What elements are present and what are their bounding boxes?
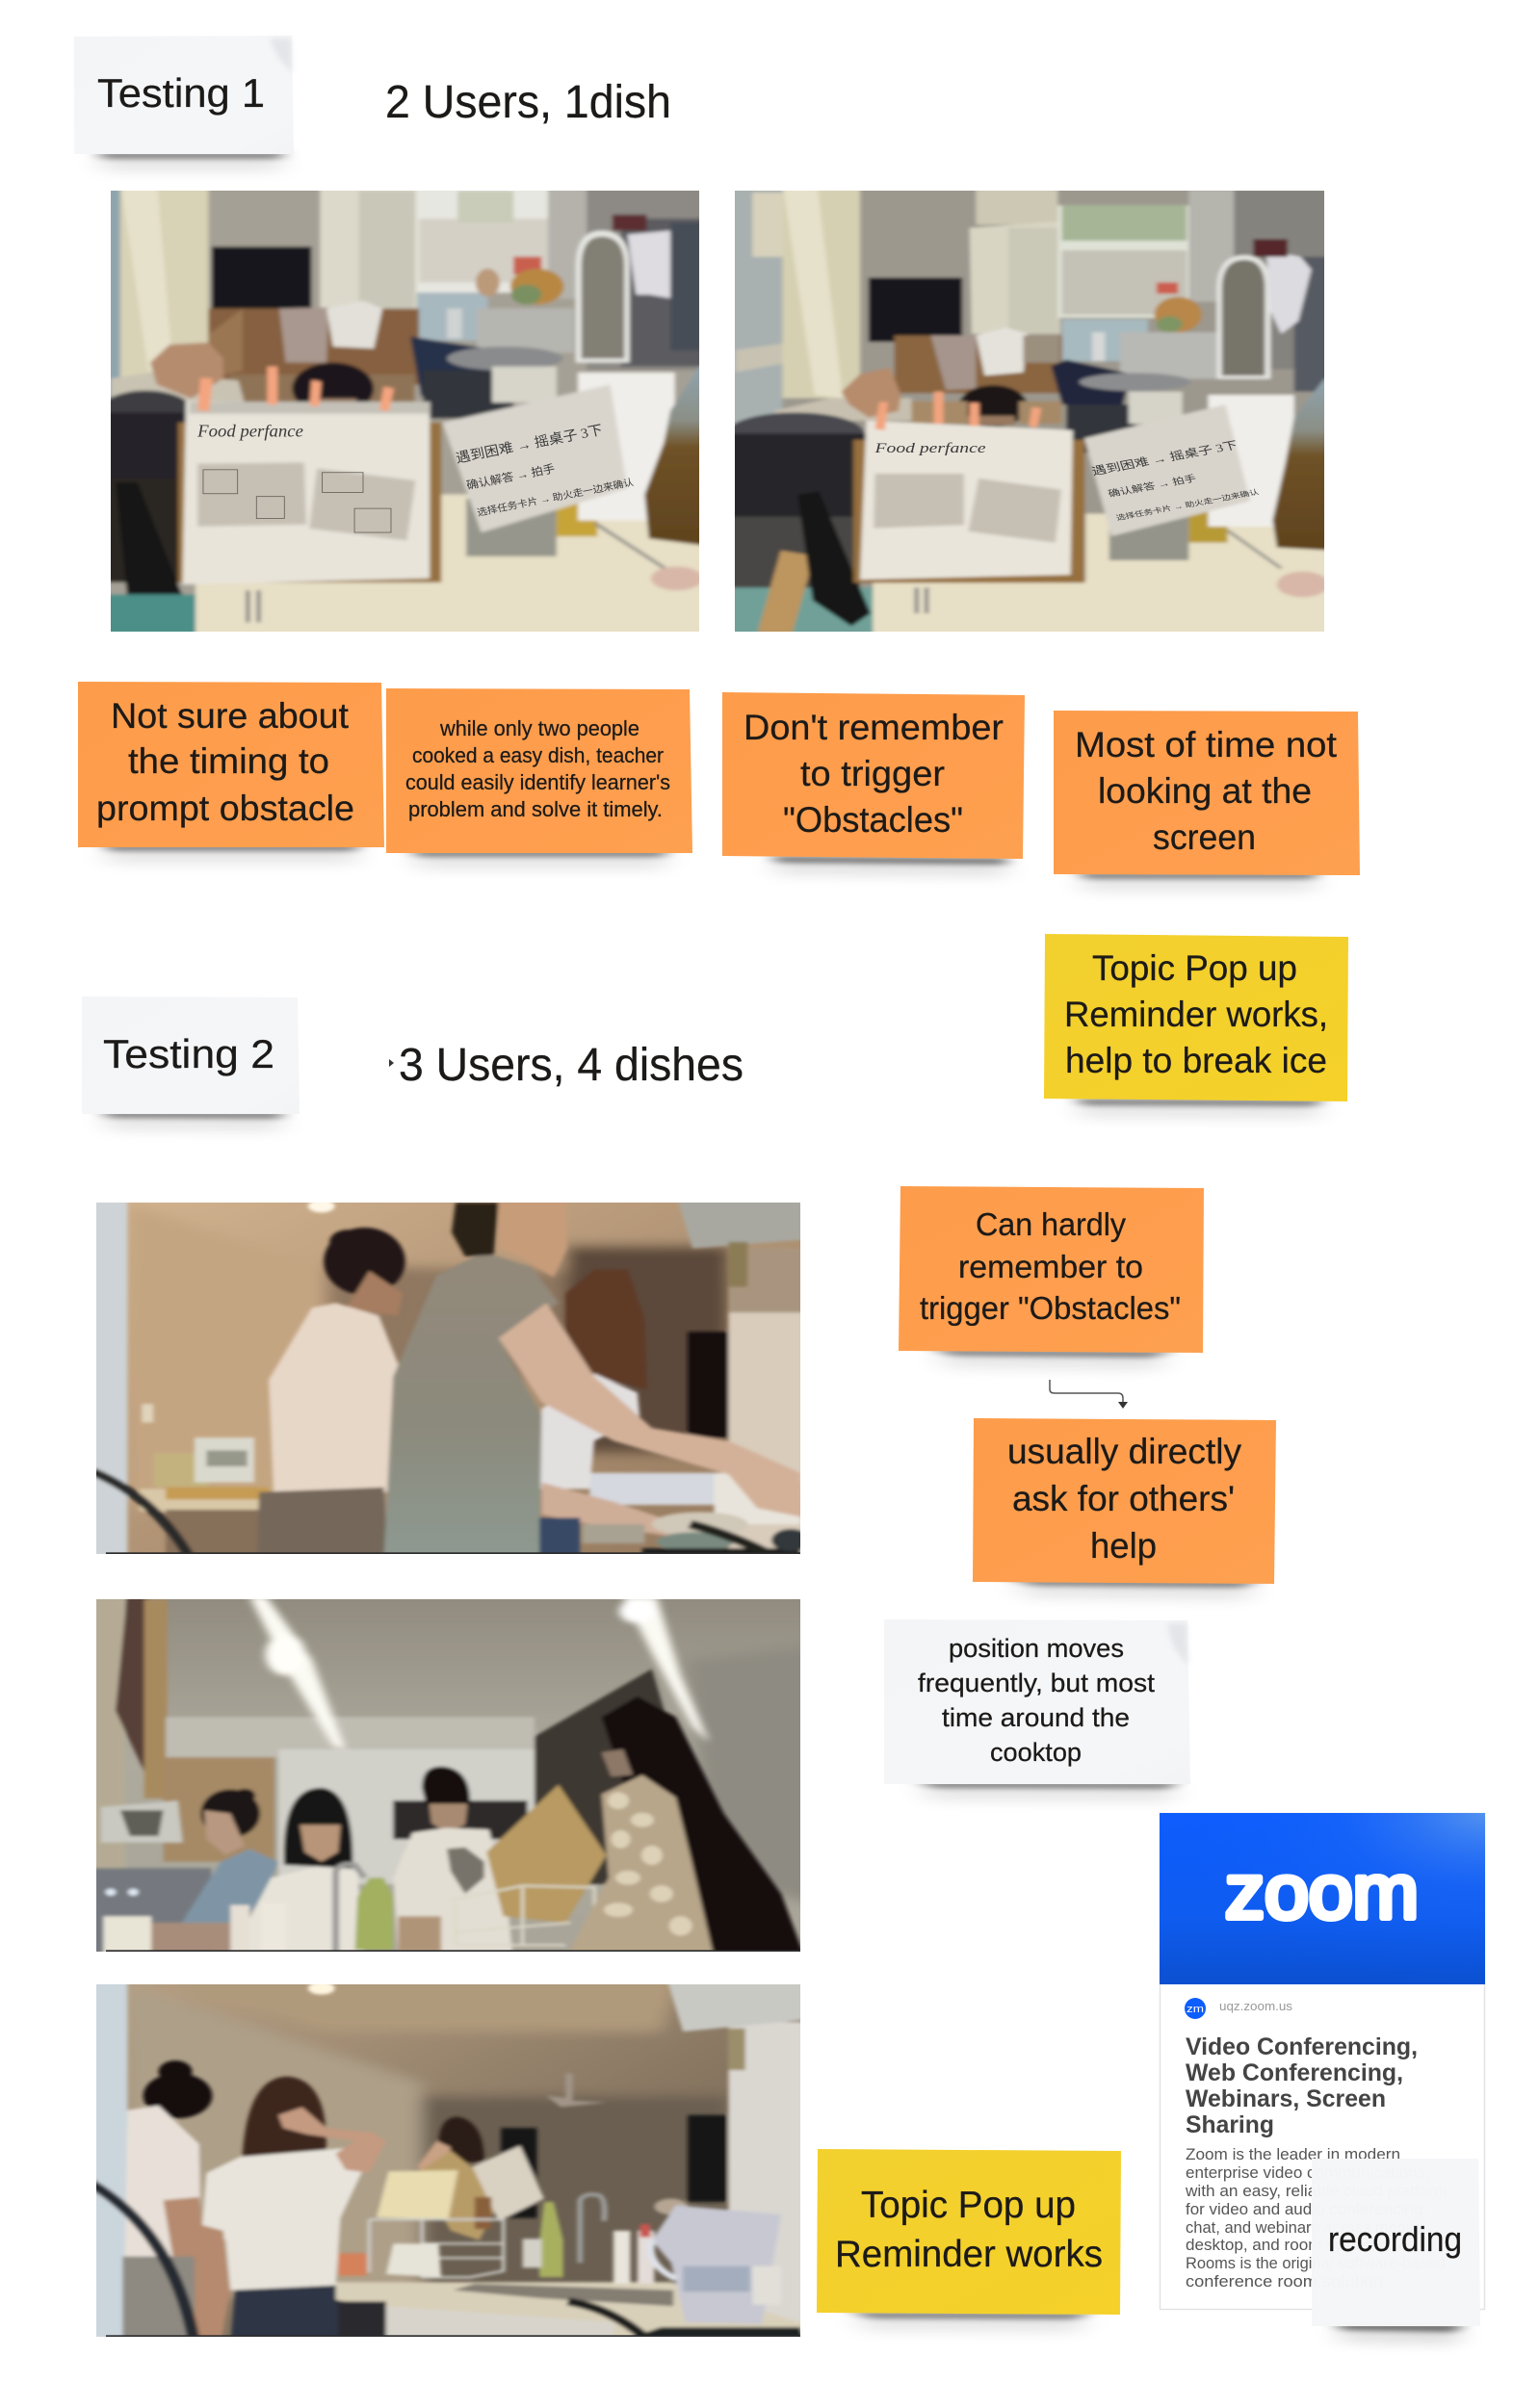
site icon and url: zm bbox=[1187, 2004, 1204, 2015]
card description: with an easy, reliable cloud platform bbox=[1185, 2182, 1448, 2200]
handwritten instruction note: 选择任务卡片 → 助火走一边来确认 bbox=[476, 476, 635, 519]
bottom edge bbox=[106, 2335, 800, 2337]
sticky note: Topic Pop up Reminder works, help to break ice: help to break ice bbox=[1065, 1041, 1327, 1080]
sticky note: while only two people: cooked a easy dish, teacher bbox=[412, 743, 664, 767]
handwriting on the prototype board: Food perfance bbox=[196, 422, 303, 440]
sticky note: Don't remember to trigger Obstacles: "Obstacles" bbox=[783, 800, 963, 840]
handwriting: taste tags bbox=[203, 470, 391, 532]
sticky note: Don't remember to trigger Obstacles bbox=[722, 692, 1025, 865]
sticky note: position moves frequently: time around the bbox=[942, 1703, 1130, 1732]
sticky note: while only two people bbox=[386, 688, 692, 857]
sticky note: Testing 2: Testing 2 bbox=[103, 1031, 274, 1076]
card description: for video and audio conferencing, bbox=[1186, 2200, 1427, 2218]
sticky note: while only two people: could easily identify learner's bbox=[405, 770, 670, 794]
link card: zoom bbox=[1160, 1813, 1485, 2309]
heading: 3 Users, 4 dishes: 3 Users, 4 dishes bbox=[399, 1040, 743, 1091]
photo: paper prototype on counter, first angle bbox=[111, 191, 699, 632]
heading: 2 Users, 1dish: 2 Users, 1dish bbox=[385, 77, 671, 128]
sticky note: Testing 2 bbox=[82, 997, 300, 1119]
handwritten instruction note: 遇到困难 → 摇桌子 3下 bbox=[455, 422, 604, 466]
sticky note: Can hardly remember to trigger Obstacles bbox=[899, 1186, 1204, 1358]
sticky note: while only two people: while only two people bbox=[439, 716, 639, 740]
sticky note: position moves frequently bbox=[884, 1619, 1190, 1789]
sticky note: Can hardly remember to trigger Obstacles: remember to bbox=[958, 1249, 1143, 1284]
photo: users in the kitchen with dish rack and jug bbox=[96, 1984, 800, 2337]
card description: chat, and webinars across mobile, bbox=[1186, 2218, 1426, 2237]
card description: desktop, and room systems. Zoom bbox=[1186, 2236, 1438, 2254]
sticky note: Most of time not looking at the screen bbox=[1054, 711, 1360, 879]
sticky note: Not sure about the timing: prompt obstacle bbox=[96, 789, 354, 828]
site icon and url bbox=[1185, 1998, 1293, 2019]
sticky note: Most of time not looking at the screen: looking at the bbox=[1098, 771, 1312, 811]
photo: paper prototype on counter, second angle bbox=[735, 191, 1324, 632]
sticky note: position moves frequently: frequently, but most bbox=[918, 1669, 1156, 1697]
card title bbox=[1186, 2033, 1418, 2138]
bottom edge bbox=[106, 1950, 800, 1952]
sticky note: Topic Pop up Reminder works, help to break ice bbox=[1044, 934, 1348, 1106]
handwritten instruction note, second angle: 选择任务卡片 → 助火走一边来确认 bbox=[1115, 487, 1260, 522]
sticky note: Topic Pop up Reminder works, help to break ice: Topic Pop up bbox=[1092, 948, 1297, 988]
arrow: from Can hardly to usually directly bbox=[1050, 1380, 1128, 1409]
sticky note: Not sure about the timing: Not sure about bbox=[111, 696, 350, 736]
handwriting on the second board: Food perfance bbox=[874, 440, 986, 456]
sticky note: Testing 1 bbox=[74, 36, 294, 159]
small connector arrow tip bbox=[389, 1059, 394, 1067]
sticky note: position moves frequently: position moves bbox=[949, 1634, 1124, 1663]
sticky note: while only two people: problem and solve it timely. bbox=[408, 797, 663, 821]
site icon and url: uqz.zoom.us bbox=[1219, 1999, 1293, 2013]
card title: Web Conferencing, bbox=[1186, 2059, 1403, 2086]
card description: Zoom is the leader in modern bbox=[1186, 2145, 1400, 2163]
sticky note: recording bbox=[1312, 2159, 1480, 2332]
sticky note: Topic Pop up Reminder works: Topic Pop up bbox=[861, 2185, 1076, 2226]
card title: Sharing bbox=[1186, 2111, 1274, 2138]
sticky note: Don't remember to trigger Obstacles: Don't remember bbox=[743, 708, 1004, 747]
sticky note: usually directly ask for others' help bbox=[973, 1418, 1276, 1588]
zoom banner: zoom bbox=[1225, 1849, 1419, 1934]
sticky note: Don't remember to trigger Obstacles: to trigger bbox=[800, 754, 945, 793]
sticky note: position moves frequently: cooktop bbox=[990, 1738, 1082, 1767]
sticky note: usually directly ask for others' help: ask for others' bbox=[1012, 1479, 1235, 1518]
sticky note: Most of time not looking at the screen: screen bbox=[1153, 817, 1256, 857]
card description bbox=[1185, 2145, 1448, 2291]
sticky note: Can hardly remember to trigger Obstacles: Can hardly bbox=[976, 1206, 1126, 1242]
sticky note: Topic Pop up Reminder works, help to break ice: Reminder works, bbox=[1064, 995, 1328, 1034]
sticky note: Topic Pop up Reminder works: Reminder works bbox=[835, 2234, 1103, 2275]
sticky note: Topic Pop up Reminder works bbox=[817, 2149, 1121, 2319]
photo: three users cooking at the stove bbox=[96, 1203, 800, 1554]
sticky note: Most of time not looking at the screen: Most of time not bbox=[1075, 725, 1338, 764]
sticky note: recording: recording bbox=[1328, 2219, 1462, 2259]
sticky note: usually directly ask for others' help: help bbox=[1090, 1526, 1157, 1566]
sticky note: Testing 1: Testing 1 bbox=[97, 70, 265, 116]
card description: conference room solution bbox=[1186, 2272, 1383, 2291]
handwritten instruction note, second angle: 确认解答 → 拍手 bbox=[1107, 472, 1198, 500]
sticky note: Not sure about the timing bbox=[78, 682, 384, 851]
handwritten instruction note: 确认解答 → 拍手 bbox=[465, 461, 557, 492]
card description: Rooms is the original software-based bbox=[1186, 2254, 1446, 2272]
sticky note: Not sure about the timing: the timing to bbox=[128, 741, 329, 781]
card title: Webinars, Screen bbox=[1186, 2085, 1386, 2112]
bottom edge bbox=[106, 1552, 800, 1554]
sticky note: usually directly ask for others' help: usually directly bbox=[1007, 1432, 1241, 1471]
sticky note: Can hardly remember to trigger Obstacles: trigger "Obstacles" bbox=[920, 1290, 1181, 1326]
handwritten instruction note, second angle: 遇到困难 → 摇桌子 3下 bbox=[1090, 439, 1239, 478]
handwritten instruction note bbox=[455, 419, 635, 520]
handwritten instruction note, second angle bbox=[1090, 438, 1260, 524]
photo: four people around the sink bbox=[96, 1599, 800, 1952]
zoom banner bbox=[1160, 1813, 1485, 1984]
card title: Video Conferencing, bbox=[1186, 2033, 1418, 2060]
card description: enterprise video communications, bbox=[1186, 2163, 1430, 2182]
